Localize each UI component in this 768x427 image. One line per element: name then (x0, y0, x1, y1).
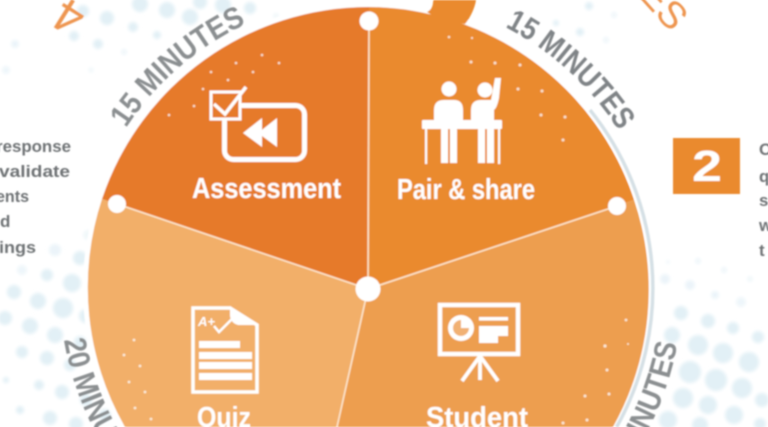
step number badge (673, 138, 740, 194)
right text block: t (759, 241, 765, 260)
sparkle dots (123, 36, 629, 424)
outer ring (86, 5, 653, 427)
right text block (758, 140, 768, 260)
icon: assessment (211, 87, 304, 160)
step number badge: 2 (692, 142, 722, 191)
segment: pair and share (368, 7, 634, 289)
duration label top right: 15 MINUTES (506, 10, 635, 129)
left text block (0, 137, 71, 257)
left text block: validate (0, 162, 70, 181)
label: assessment: Assessment (192, 173, 341, 205)
pie chart (88, 7, 649, 427)
icon: pair and share (422, 78, 502, 164)
segment dividers and nodes (108, 12, 626, 427)
segment: quiz (88, 199, 368, 427)
label: pair and share: Pair & share (397, 174, 535, 206)
left text block: ings (0, 238, 36, 257)
left text block: d (0, 212, 10, 231)
segment: assessment (102, 7, 369, 289)
segment: student (337, 200, 649, 427)
top tab (427, 0, 476, 24)
icon: quiz document (193, 306, 259, 392)
icon: quiz document: A+ (197, 314, 215, 329)
duration label top left: 15 MINUTES (111, 6, 244, 128)
icon: student presentation (440, 305, 518, 381)
